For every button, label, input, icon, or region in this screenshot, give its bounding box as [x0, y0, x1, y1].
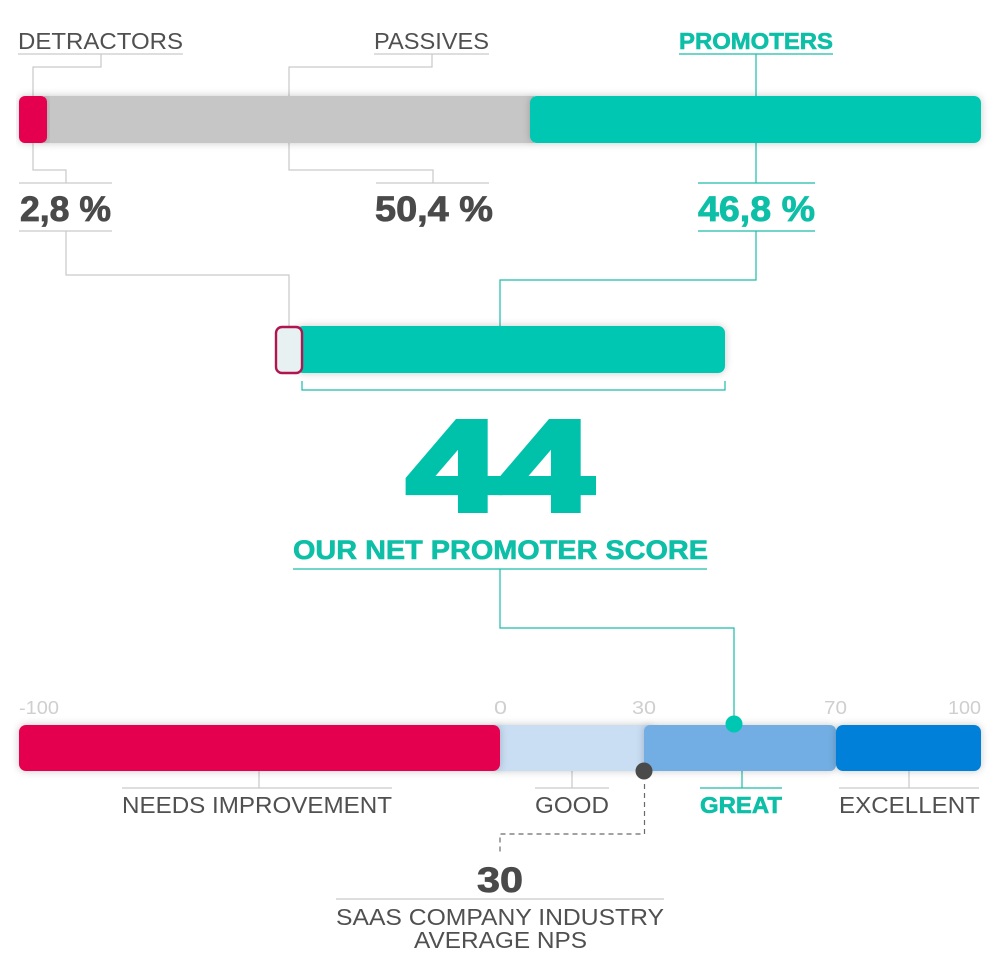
scale tick labels [19, 698, 981, 718]
label: great: GREAT [700, 792, 782, 818]
industry average value and caption [336, 861, 664, 953]
marker: industry average [636, 762, 652, 780]
label: detractors: DETRACTORS [18, 28, 183, 54]
value: promoters 46,8 %: 46,8 % [698, 190, 815, 229]
value: detractors 2,8 %: 2,8 % [20, 190, 111, 229]
scale tick labels: -100 [19, 698, 59, 718]
industry average value and caption: SAAS COMPANY INDUSTRY [336, 904, 664, 930]
scale tick labels: 0 [494, 698, 507, 718]
connector lines: passives [289, 54, 433, 183]
connector lines: promoters [500, 54, 756, 326]
marker: our score [726, 716, 742, 732]
industry average value and caption: AVERAGE NPS [414, 927, 587, 953]
scale tick labels: 30 [632, 698, 656, 718]
label: passives: PASSIVES [374, 28, 489, 54]
stacked bar: survey response shares [19, 96, 981, 143]
net score bar [276, 326, 725, 373]
heading: our net promoter score: OUR NET PROMOTER SCORE [293, 535, 708, 565]
value: passives 50,4 %: 50,4 % [375, 190, 493, 229]
label: good: GOOD [535, 792, 609, 818]
scale tick labels: 100 [948, 698, 981, 718]
label: needs improvement: NEEDS IMPROVEMENT [122, 792, 392, 818]
label: promoters: PROMOTERS [679, 28, 833, 54]
connector lines: detractors [33, 54, 289, 326]
connectors from scale to labels [259, 771, 909, 788]
industry average value and caption: 30 [477, 861, 523, 900]
label: excellent: EXCELLENT [839, 792, 980, 818]
scale tick labels: 70 [824, 698, 847, 718]
scale bar [19, 725, 981, 771]
big score number: 44 [407, 395, 593, 538]
dashed connector to industry average [500, 784, 644, 852]
bracket under net score bar [302, 381, 725, 390]
connector from score to scale [500, 569, 734, 724]
